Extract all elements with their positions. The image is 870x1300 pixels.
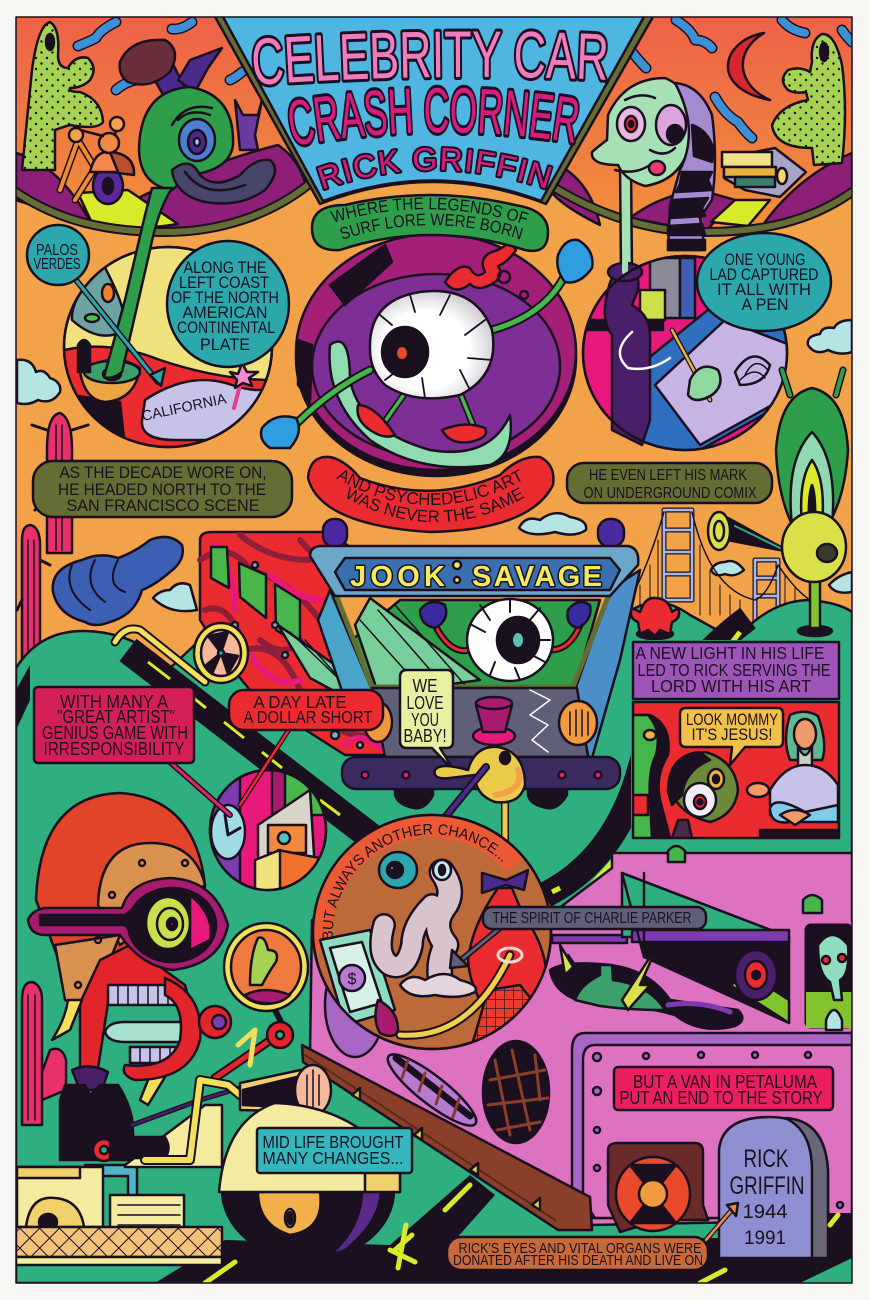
banner: psychedelic art: AND PSYCHEDELIC ART <box>336 469 521 506</box>
grey pod with eye <box>72 262 125 336</box>
golden gate bridge <box>635 510 810 620</box>
bubble: one young lad: ONE YOUNG <box>724 251 806 269</box>
banner: where the legends of surf lore were born <box>310 194 550 252</box>
dollar bill: $ <box>348 971 357 988</box>
banner: as the decade wore on <box>33 461 292 517</box>
label: spirit of charlie parker <box>450 907 706 968</box>
olive scene rims <box>16 185 852 232</box>
bubble: along the left coast <box>167 241 289 367</box>
speech bubble: we love you baby: LOVE <box>406 693 444 713</box>
teal leg <box>85 1165 137 1205</box>
comic frame <box>633 702 839 838</box>
title line 2: CRASH CORNER <box>288 84 580 148</box>
pink cacti upper left <box>17 413 88 668</box>
lower left oval behind wheel arch <box>325 953 385 1057</box>
eyeball <box>370 291 493 398</box>
top hat driver <box>412 697 525 860</box>
panel: psychedelic bus body <box>200 532 420 755</box>
hole with train <box>550 945 742 1029</box>
caption: A NEW LIGHT IN HIS LIFE <box>636 643 824 663</box>
speech bubble: we love you baby <box>400 670 455 772</box>
green lollipop character head with hat <box>120 40 275 203</box>
legs <box>386 393 473 425</box>
lime cactus left <box>22 22 103 170</box>
white swoosh <box>620 332 670 369</box>
label: vital organs <box>447 1203 738 1270</box>
tombstone: GRIFFIN <box>730 1172 804 1200</box>
look mommy bubble: IT'S JESUS! <box>692 725 772 744</box>
bubble: palos verdes <box>27 225 89 285</box>
small pink cactus <box>22 982 66 1125</box>
tan stripe <box>98 843 205 945</box>
panel: small circle with tv <box>210 770 330 895</box>
bubble: along the left coast: OF THE NORTH <box>171 289 279 307</box>
purple hills right <box>550 153 852 232</box>
tombstone: 1944 <box>742 1202 788 1223</box>
banner: underground comix: ON UNDERGROUND COMIX <box>584 485 757 502</box>
bubble: one young lad: A PEN <box>742 296 788 314</box>
california label: CALIFORNIA <box>140 391 228 425</box>
speech bubble: we love you baby: YOU <box>411 710 439 730</box>
ring text: BUT ALWAYS ANOTHER CHANCE... <box>322 824 503 939</box>
palos verdes arrow <box>76 280 165 386</box>
green knob <box>668 846 822 913</box>
teal eye lollipop <box>379 852 417 888</box>
mirror with cactus <box>224 923 308 1030</box>
panel: charlie parker circle <box>312 814 552 1050</box>
bubble: one young lad: LAD CAPTURED <box>710 266 819 284</box>
neck <box>620 165 632 272</box>
horn <box>727 518 790 552</box>
banner: psychedelic art: WAS NEVER THE SAME <box>347 486 524 522</box>
green character stalk <box>104 188 172 378</box>
panel: jook savage bus front: SAVAGE <box>472 561 602 593</box>
head <box>592 78 692 186</box>
label: with many a great artist: IRRESPONSIBILITY <box>44 739 184 759</box>
scarf <box>668 83 715 250</box>
window stripes <box>278 625 360 705</box>
panel: california circle <box>64 247 272 447</box>
panel: surf record with walking eye <box>261 234 592 476</box>
alien bunny on stick <box>708 370 848 636</box>
bubble: along the left coast: LEFT COAST <box>179 274 269 292</box>
label: with many a great artist: "GREAT ARTIST" <box>57 707 175 727</box>
mint face character with scarf <box>592 78 715 272</box>
title banner <box>214 18 654 206</box>
purple coral <box>235 100 262 150</box>
label: a van in petaluma <box>614 1067 833 1110</box>
hat band and feather <box>155 64 185 94</box>
title line 3: RICK GRIFFIN <box>316 146 554 191</box>
banner: underground comix <box>567 463 772 503</box>
woman <box>633 715 670 838</box>
tombstone: 1991 <box>744 1228 786 1249</box>
base pod <box>80 360 140 402</box>
red figure <box>468 888 547 1020</box>
boot <box>118 1200 197 1243</box>
panel: jook savage bus front: JOOK <box>350 561 445 593</box>
panel: pen drawing circle <box>583 256 790 450</box>
panel: helmet figure <box>22 793 250 1243</box>
wheels <box>395 785 567 808</box>
panel: new light caption and comic <box>631 640 841 840</box>
purple hills left <box>16 145 306 230</box>
banner: as the decade wore on: SAN FRANCISCO SCENE <box>66 496 260 515</box>
black axle <box>110 1137 168 1158</box>
fist right <box>557 240 592 282</box>
blue thumbs-up hand <box>53 537 183 625</box>
banner: where the legends of surf lore were born: WHERE THE LEGENDS OF <box>330 198 529 223</box>
purple side trim <box>552 935 627 943</box>
right road <box>545 618 748 900</box>
red face <box>80 945 190 1075</box>
panel: left sky scene <box>16 17 310 232</box>
bubble: palos verdes: PALOS <box>36 242 78 259</box>
lime cactus right <box>772 34 845 165</box>
label: mid life <box>257 1128 412 1173</box>
lattice <box>16 1227 222 1257</box>
panel: pink van <box>310 853 855 1225</box>
speech bubble: we love you baby: BABY! <box>404 726 446 746</box>
red octopus <box>631 598 679 639</box>
arch <box>26 1198 84 1227</box>
child <box>670 752 738 822</box>
label: with many a great artist: WITH MANY A <box>60 692 168 712</box>
look mommy bubble: LOOK MOMMY <box>686 710 778 729</box>
bubble: along the left coast: CONTINENTAL <box>177 319 275 337</box>
suit <box>60 1085 135 1160</box>
moped <box>60 117 134 204</box>
jesus <box>786 712 824 760</box>
label: with many a great artist: GENIUS GAME WITH <box>42 723 188 743</box>
banner: as the decade wore on: AS THE DECADE WORE ON, <box>60 463 266 482</box>
label: mid life: MANY CHANGES... <box>262 1148 404 1168</box>
red valve <box>93 1139 115 1161</box>
california lavender shape <box>142 380 272 440</box>
eye <box>179 119 215 161</box>
left road <box>16 650 375 840</box>
tongue <box>375 1000 398 1036</box>
bottom road <box>155 1175 852 1283</box>
oval grill <box>483 1041 549 1143</box>
clock <box>211 805 245 859</box>
tombstone: RICK <box>744 1145 789 1173</box>
cream panel <box>17 1167 103 1227</box>
banner: where the legends of surf lore were born: SURF LORE WERE BORN <box>340 213 523 240</box>
bubble: palos verdes: VERDES <box>34 256 80 273</box>
brown ramp <box>302 1045 592 1230</box>
yellow horn <box>240 1068 315 1112</box>
black sea <box>78 394 126 437</box>
bubble: along the left coast: ALONG THE <box>184 259 266 277</box>
shoes <box>358 405 395 437</box>
blue roof lights <box>323 519 347 547</box>
crescent moon <box>728 33 770 100</box>
smoke <box>381 872 450 978</box>
cream machine body <box>16 1065 331 1265</box>
bus windows <box>211 547 229 588</box>
label: a day late a dollar short: A DAY LATE <box>254 692 346 712</box>
blond hair <box>52 1000 165 1105</box>
speech bubble: we love you baby: WE <box>412 676 438 696</box>
hat crown <box>120 40 175 84</box>
road dashes <box>205 1185 838 1283</box>
ring band <box>321 827 515 950</box>
label: spirit of charlie parker: THE SPIRIT OF CHARLIE PARKER <box>492 910 692 927</box>
windshield <box>335 592 610 687</box>
slot grill <box>380 1045 484 1135</box>
bus eyeball <box>467 599 553 681</box>
radiation wheel <box>194 623 248 683</box>
panel: right sky scene <box>550 17 852 232</box>
fist left <box>261 416 299 448</box>
label: mid life: MID LIFE BROUGHT <box>262 1132 404 1152</box>
label: with many a great artist <box>34 687 194 763</box>
banner: psychedelic art <box>306 456 555 534</box>
collar <box>72 1066 108 1090</box>
banner: underground comix: HE EVEN LEFT HIS MARK <box>589 467 747 484</box>
label: vital organs: DONATED AFTER HIS DEATH AND LIVE ON <box>453 1253 703 1269</box>
red jaw ring <box>124 978 201 1080</box>
lime road right <box>711 200 770 226</box>
grille <box>372 688 588 757</box>
record in van doorway <box>608 1143 708 1232</box>
teeth <box>108 985 178 1005</box>
label: vital organs: RICK'S EYES AND VITAL ORGANS WERE <box>458 1241 702 1257</box>
label: a van in petaluma: PUT AN END TO THE STORY <box>620 1088 822 1108</box>
mint surfboard <box>330 342 511 467</box>
label: a day late a dollar short: A DOLLAR SHORT <box>244 707 373 727</box>
red lever <box>215 1022 293 1078</box>
look mommy bubble <box>680 708 783 765</box>
moustache <box>172 160 275 204</box>
caption: LED TO RICK SERVING THE <box>638 660 830 680</box>
dollar bill <box>320 930 395 1025</box>
crew fists and arms <box>435 625 580 651</box>
right window with skull <box>803 922 855 1030</box>
cassette <box>722 148 806 197</box>
helmet dome <box>36 793 205 1003</box>
clouds <box>17 320 852 611</box>
purple arm <box>132 1085 250 1125</box>
yellow crank <box>145 1080 240 1160</box>
tombstone <box>719 1117 828 1258</box>
pen and hand <box>672 330 710 400</box>
arm left <box>295 370 370 425</box>
bow tie <box>482 870 528 893</box>
arm right <box>492 275 565 330</box>
bumper <box>342 757 620 789</box>
wheel and fender <box>219 1103 400 1260</box>
speech tail arrows <box>170 728 290 815</box>
title line 1: CELEBRITY CAR <box>252 28 608 88</box>
red land <box>64 347 272 447</box>
lime road left <box>78 190 178 228</box>
label: a day late a dollar short <box>229 690 383 730</box>
label: a van in petaluma: BUT A VAN IN PETALUMA <box>633 1072 817 1092</box>
panel: jook savage bus front <box>310 519 640 808</box>
long nose and eye <box>28 878 228 970</box>
star marker <box>234 385 240 408</box>
bubble: along the left coast: PLATE <box>200 336 250 354</box>
bubble: one young lad <box>697 233 831 331</box>
van window <box>622 873 789 1023</box>
caption: LORD WITH HIS ART <box>651 676 811 696</box>
lower van panel <box>572 1033 852 1218</box>
banner: as the decade wore on: HE HEADED NORTH TO THE <box>58 480 266 499</box>
red drip <box>445 240 516 290</box>
bubble: one young lad: IT ALL WITH <box>717 281 811 299</box>
destination plate <box>310 546 638 596</box>
yellow tube <box>400 955 510 1035</box>
bubble: along the left coast: AMERICAN <box>182 304 268 322</box>
yellow pipe <box>115 629 205 682</box>
caption <box>633 642 839 699</box>
bus swirls <box>200 535 385 736</box>
green ground with hills <box>16 600 852 1283</box>
orange background panel <box>16 183 852 666</box>
side pillars <box>318 590 372 700</box>
ink bottle <box>605 270 650 445</box>
